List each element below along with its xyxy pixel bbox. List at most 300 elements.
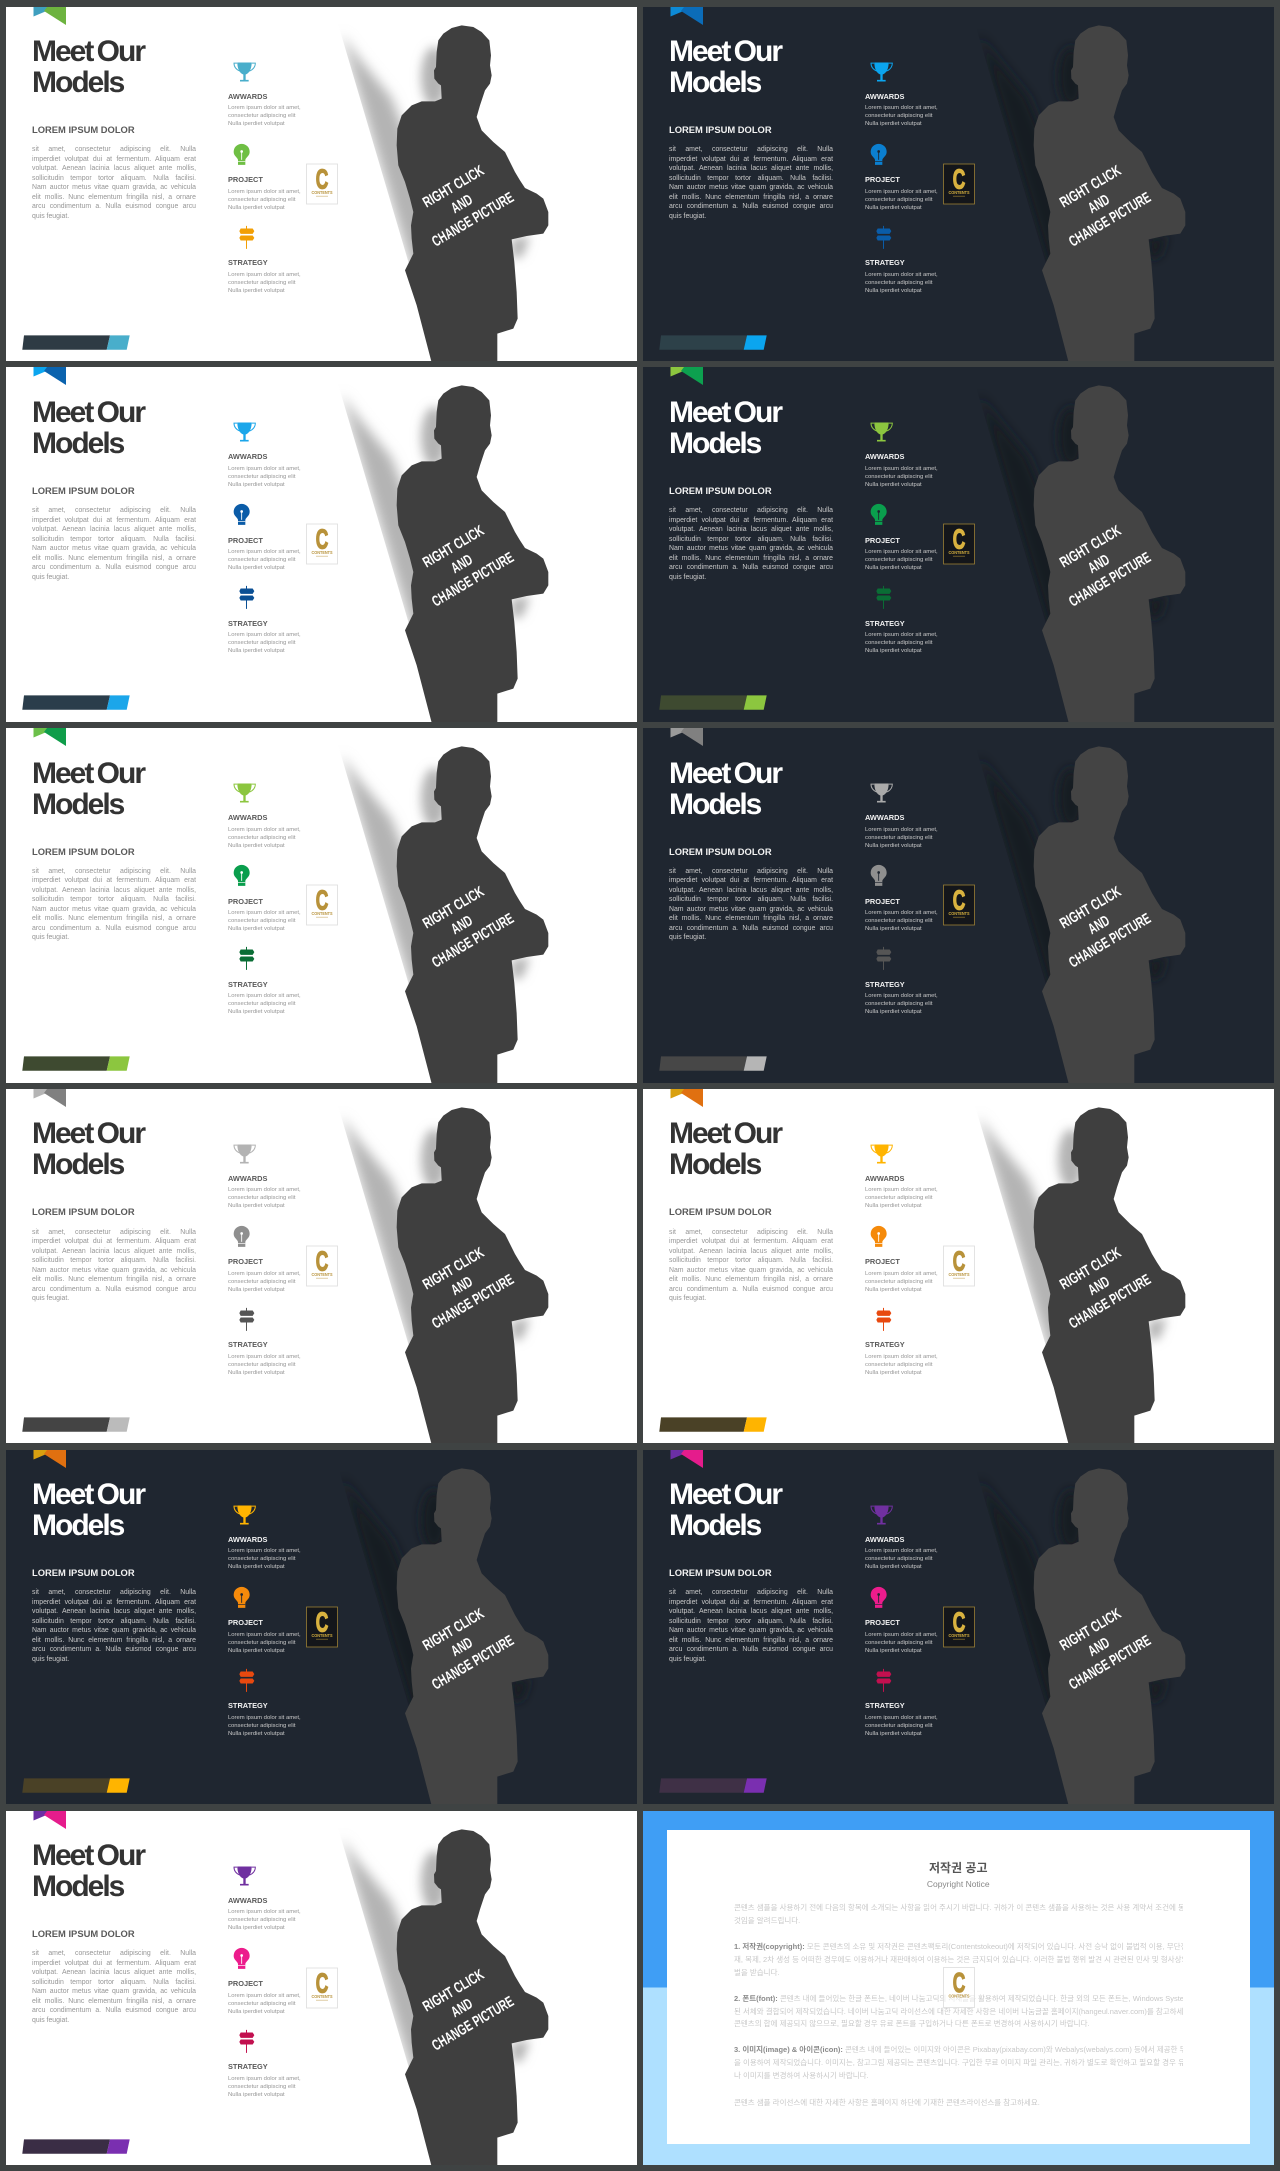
logo badge: C [316,163,328,194]
body text: quis feugiat. [669,213,706,220]
body text: imperdiet volutpat dui at fermentum. Aliquam erat [32,877,196,884]
body text: quis feugiat. [669,934,706,941]
item: strategy: Nulla iperdiet volutpat [228,288,285,294]
picture placeholder label: RIGHT CLICK [1057,883,1124,932]
footer bar [659,696,767,710]
picture placeholder label: CHANGE PICTURE [429,549,517,611]
item: awwards: consectetur adipiscing elit [228,835,295,841]
title: Models [32,1509,123,1542]
logo badge: CONTENTS [948,911,970,916]
diagonal shadow [341,1477,530,1760]
body text: sollicitudin tempor tortor aliquam. Nulla facilisi. [669,1618,833,1625]
item: project: PROJECT [865,897,900,906]
body text: arcu condimentum a. Nulla euismod congue arcu [32,1286,196,1293]
item: awwards [228,1534,310,1571]
item: project: Nulla iperdiet volutpat [865,926,922,932]
item: strategy [228,1700,310,1738]
item: awwards: Nulla iperdiet volutpat [865,843,922,849]
item: awwards: Lorem ipsum dolor sit amet, [865,827,938,833]
item: awwards: Nulla iperdiet volutpat [228,121,285,127]
logo badge: CONTENTS [312,911,333,916]
item: strategy [865,619,938,654]
item: awwards [865,1174,938,1209]
body text [669,506,833,581]
title: Meet Our [32,396,144,429]
picture placeholder label [1057,1605,1154,1693]
subheading: LOREM IPSUM DOLOR [669,1567,772,1578]
item: strategy: Lorem ipsum dolor sit amet, [228,993,301,999]
body text [669,1228,833,1302]
item: awwards: Nulla iperdiet volutpat [228,843,285,849]
item: strategy: Nulla iperdiet volutpat [865,648,922,654]
picture placeholder label: CHANGE PICTURE [429,1632,517,1693]
item: project: Nulla iperdiet volutpat [228,1287,285,1293]
body text: sollicitudin tempor tortor aliquam. Nulla facilisi. [32,175,196,182]
diagonal shadow [341,755,530,1038]
icon: signpost [876,225,891,248]
silhouette [397,386,548,723]
item: project: PROJECT [228,1979,263,1988]
icon: signpost [876,586,891,609]
body text: Nam auctor metus vitae quam gravida, ac vehicula [32,906,196,913]
footer bar [22,1417,130,1432]
picture placeholder label [420,1244,517,1332]
icon: signpost [876,947,891,970]
item: strategy: STRATEGY [228,2062,268,2071]
body text: Nam auctor metus vitae quam gravida, ac vehicula [32,1267,196,1274]
item: awwards [228,452,301,488]
picture placeholder label: RIGHT CLICK [420,522,487,572]
item: awwards: AWWARDS [228,452,267,461]
body text: sollicitudin tempor tortor aliquam. Nulla facilisi. [32,896,196,903]
notice line: 콘텐츠 샘플 라이선스에 대한 자세한 사항은 홈페이지 하단에 기재한 콘텐츠라이선스를 참고하세요. [734,2098,1040,2107]
picture placeholder label [1057,162,1154,250]
title [32,757,146,821]
ribbon [670,728,703,746]
item: awwards: Lorem ipsum dolor sit amet, [865,466,938,472]
item: project [865,536,938,571]
item: strategy: consectetur adipiscing elit [228,280,295,286]
icon: light bulb [234,143,250,164]
body text: Nam auctor metus vitae quam gravida, ac vehicula [669,184,833,191]
body text: volutpat. Aenean lacinia lacus aliquet ante mollis, [669,1248,833,1255]
body text: sollicitudin tempor tortor aliquam. Nulla facilisi. [32,1979,196,1986]
item: strategy [228,980,301,1015]
item: strategy: Lorem ipsum dolor sit amet, [228,272,301,278]
logo badge: CONTENTS [312,1272,333,1277]
icon: trophy [234,1144,255,1163]
item: awwards [865,1534,947,1571]
panel: slide 9, dark, orange [6,1450,636,1804]
item: project: Lorem ipsum dolor sit amet, [865,1632,938,1638]
notice line: 것임을 알려드립니다. [734,1916,800,1925]
picture placeholder label: RIGHT CLICK [1057,1605,1124,1654]
title: Models [32,788,123,821]
picture placeholder label: AND [448,551,476,577]
diagonal shadow [978,755,1167,1038]
subheading: LOREM IPSUM DOLOR [32,846,135,857]
logo badge: C [953,1245,965,1276]
body text: sollicitudin tempor tortor aliquam. Nulla facilisi. [32,1257,196,1264]
icon: light bulb [234,504,250,525]
body text: quis feugiat. [32,2017,69,2024]
item: awwards: Lorem ipsum dolor sit amet, [228,105,301,111]
body text: imperdiet volutpat dui at fermentum. Aliquam erat [669,1599,833,1606]
item: project [865,175,938,210]
body text: imperdiet volutpat dui at fermentum. Aliquam erat [32,1599,196,1606]
notice line: 1. 저작권(copyright): 모든 콘텐츠의 소유 및 저작권은 콘텐츠팩토리(Contentstokeout)에 저작되어 있습니다. 사전 승낙 없이 불법적 이용, 무단전 [734,1942,1183,1951]
silhouette [397,25,548,362]
panel: slide 4, dark, green [643,367,1274,722]
item: project: PROJECT [228,175,263,184]
item: project: Nulla iperdiet volutpat [865,1287,922,1293]
item: awwards: AWWARDS [228,813,267,822]
body text: imperdiet volutpat dui at fermentum. Aliquam erat [32,156,196,163]
footer bar [22,2139,130,2153]
title: Models [32,66,123,99]
logo badge: CONTENTS [312,550,333,555]
subheading: LOREM IPSUM DOLOR [32,1206,135,1217]
item: strategy: Nulla iperdiet volutpat [865,1370,922,1376]
item: awwards: AWWARDS [865,1535,904,1544]
logo badge [306,163,338,204]
item: strategy: Lorem ipsum dolor sit amet, [228,1715,301,1721]
item: project: Lorem ipsum dolor sit amet, [228,188,301,194]
logo badge [306,884,338,925]
silhouette [1034,1107,1185,1445]
item: project: consectetur adipiscing elit [865,918,932,924]
picture placeholder label: RIGHT CLICK [420,162,487,211]
body text: volutpat. Aenean lacinia lacus aliquet ante mollis, [669,1608,833,1615]
logo badge: C [316,524,328,555]
body text: imperdiet volutpat dui at fermentum. Aliquam erat [669,517,833,524]
item: awwards: consectetur adipiscing elit [865,1556,932,1562]
icon: signpost [239,586,254,609]
body text: sit amet, consectetur adipiscing elit. Nulla [669,868,833,875]
picture placeholder label [420,883,517,971]
item: strategy [228,1340,301,1376]
title [669,1479,781,1541]
item: project: consectetur adipiscing elit [228,196,295,202]
item: strategy [865,980,938,1015]
diagonal shadow [341,1116,530,1399]
body text: elit mollis. Nunc elementum fringilla nisl, a ornare [32,1637,196,1644]
title: Meet Our [32,1117,144,1150]
diagonal shadow [978,1116,1167,1399]
ribbon [34,367,66,385]
item: project [228,1978,310,2016]
silhouette [1034,1468,1185,1805]
body text: arcu condimentum a. Nulla euismod congue arcu [669,925,833,932]
item: strategy: Lorem ipsum dolor sit amet, [865,272,938,278]
body text: sollicitudin tempor tortor aliquam. Nulla facilisi. [32,1618,196,1625]
panel: slide 6, dark, gray [643,728,1274,1083]
picture placeholder label: RIGHT CLICK [1057,522,1124,572]
picture placeholder label: CHANGE PICTURE [1066,549,1154,611]
silhouette [397,1829,548,2166]
ribbon [670,1089,703,1107]
title [32,35,146,99]
icon: light bulb [234,865,250,886]
body text: arcu condimentum a. Nulla euismod congue arcu [32,203,196,210]
icon: trophy [234,1505,255,1524]
body text: sollicitudin tempor tortor aliquam. Nulla facilisi. [669,175,833,182]
item: project [228,897,301,932]
body text [32,1228,196,1302]
picture placeholder label: CHANGE PICTURE [429,910,517,971]
title [32,1117,146,1181]
body text: arcu condimentum a. Nulla euismod congue arcu [32,925,196,932]
logo badge: C [953,1606,965,1637]
picture placeholder label: AND [448,191,476,217]
body text: elit mollis. Nunc elementum fringilla nisl, a ornare [32,1276,196,1283]
item: project [228,175,301,210]
body text: Nam auctor metus vitae quam gravida, ac vehicula [32,1627,196,1634]
title [32,1479,144,1541]
item: awwards [228,1174,301,1209]
title [669,1117,783,1181]
body text: volutpat. Aenean lacinia lacus aliquet ante mollis, [32,1608,196,1615]
item: awwards: consectetur adipiscing elit [865,113,932,119]
notice title: 저작권 공고 [929,1860,988,1874]
silhouette [1034,25,1185,362]
item: project [865,1257,938,1293]
body text: quis feugiat. [32,1295,69,1302]
body text: elit mollis. Nunc elementum fringilla nisl, a ornare [669,555,833,562]
body text: arcu condimentum a. Nulla euismod congue arcu [669,564,833,571]
subheading: LOREM IPSUM DOLOR [32,1928,135,1939]
item: project [865,897,938,932]
item: awwards: AWWARDS [228,92,267,100]
icon: signpost [239,947,254,970]
title: Models [669,427,760,460]
item: project: Nulla iperdiet volutpat [865,1648,922,1654]
body text: Nam auctor metus vitae quam gravida, ac vehicula [669,545,833,552]
silhouette [1034,386,1185,723]
body text: Nam auctor metus vitae quam gravida, ac vehicula [32,184,196,191]
diagonal shadow [978,34,1167,316]
icon: light bulb [871,1226,887,1247]
body text: arcu condimentum a. Nulla euismod congue arcu [669,1646,833,1653]
body text: elit mollis. Nunc elementum fringilla nisl, a ornare [32,1998,196,2005]
body text: imperdiet volutpat dui at fermentum. Aliquam erat [32,1238,196,1245]
item: awwards: Lorem ipsum dolor sit amet, [228,1909,301,1915]
item: strategy: Nulla iperdiet volutpat [228,2092,285,2098]
item: strategy: consectetur adipiscing elit [865,1723,932,1729]
logo badge [944,524,974,564]
body text: imperdiet volutpat dui at fermentum. Aliquam erat [669,156,833,163]
item: project: consectetur adipiscing elit [228,1640,295,1646]
item: awwards: AWWARDS [228,1174,267,1183]
body text [32,506,196,581]
ribbon [670,1450,703,1468]
title: Meet Our [32,757,144,790]
diagonal shadow [341,1838,530,2120]
logo badge: CONTENTS [948,1633,970,1638]
icon: signpost [876,1669,891,1692]
body text: arcu condimentum a. Nulla euismod congue arcu [669,1286,833,1293]
logo badge [944,884,974,925]
body text: imperdiet volutpat dui at fermentum. Aliquam erat [32,1960,196,1967]
diagonal shadow [978,1477,1167,1760]
item: awwards: consectetur adipiscing elit [228,1556,295,1562]
icon: signpost [239,1308,254,1331]
notice subtitle: Copyright Notice [927,1878,990,1888]
logo badge: C [953,524,965,555]
body text: sit amet, consectetur adipiscing elit. Nulla [32,1229,196,1236]
body text [669,868,833,941]
ribbon [34,1450,66,1468]
item: project: PROJECT [228,1618,263,1627]
picture placeholder label [420,1605,517,1693]
item: strategy: consectetur adipiscing elit [865,1001,932,1007]
title: Meet Our [32,1478,144,1511]
title [669,757,783,821]
silhouette [397,1107,548,1445]
body text: quis feugiat. [32,574,69,581]
logo badge [944,163,974,204]
item: strategy: STRATEGY [228,1340,268,1349]
body text: elit mollis. Nunc elementum fringilla nisl, a ornare [32,555,196,562]
item: strategy: Nulla iperdiet volutpat [865,1731,922,1737]
body text: sollicitudin tempor tortor aliquam. Nulla facilisi. [669,896,833,903]
footer bar [22,696,130,710]
icon: trophy [234,423,255,442]
logo badge: CONTENTS [312,190,333,194]
logo badge: CONTENTS [312,1633,333,1638]
item: awwards: Lorem ipsum dolor sit amet, [228,1548,301,1554]
item: project: PROJECT [228,536,263,545]
icon: light bulb [871,1587,887,1608]
footer bar [22,1056,130,1071]
picture placeholder label: AND [448,1995,476,2021]
item: awwards [865,92,938,127]
item: strategy: consectetur adipiscing elit [865,640,932,646]
item: awwards: Nulla iperdiet volutpat [228,1203,285,1209]
subheading: LOREM IPSUM DOLOR [32,485,135,496]
footer bar [659,1417,767,1432]
item: awwards: consectetur adipiscing elit [865,835,932,841]
item: project: Nulla iperdiet volutpat [865,565,922,571]
picture placeholder label: AND [1085,551,1113,577]
icon: signpost [239,2029,254,2052]
logo badge: CONTENTS [948,550,970,555]
body text: sit amet, consectetur adipiscing elit. Nulla [32,868,196,875]
item: project: PROJECT [865,175,900,184]
item: awwards: consectetur adipiscing elit [228,1917,295,1923]
picture placeholder label: RIGHT CLICK [420,1605,487,1654]
item: awwards: consectetur adipiscing elit [228,1195,295,1201]
body text: quis feugiat. [32,934,69,941]
icon: trophy [234,1866,255,1885]
body text: quis feugiat. [32,213,69,220]
item: awwards: Lorem ipsum dolor sit amet, [228,827,301,833]
panel: slide 11, white, purple [6,1810,636,2165]
item: strategy: Nulla iperdiet volutpat [865,288,922,294]
body text: quis feugiat. [669,1295,706,1302]
footer bar [22,1778,130,1792]
item: project: consectetur adipiscing elit [865,196,932,202]
picture placeholder label [420,522,517,611]
item: strategy: Lorem ipsum dolor sit amet, [228,1354,301,1360]
icon: light bulb [234,1587,250,1608]
title: Models [32,1870,123,1903]
picture placeholder label: CHANGE PICTURE [1066,189,1154,250]
item: strategy: Nulla iperdiet volutpat [228,1731,285,1737]
body text: imperdiet volutpat dui at fermentum. Aliquam erat [669,877,833,884]
item: awwards: AWWARDS [865,452,904,461]
logo badge [306,1606,338,1647]
body text: arcu condimentum a. Nulla euismod congue arcu [32,2007,196,2014]
logo badge [944,1245,974,1286]
icon: trophy [871,1505,892,1524]
body text: volutpat. Aenean lacinia lacus aliquet ante mollis, [32,887,196,894]
logo badge [944,1606,974,1647]
item: strategy: STRATEGY [228,980,268,989]
body text: Nam auctor metus vitae quam gravida, ac vehicula [669,906,833,913]
panel: slide 10, dark, purple [643,1450,1274,1804]
logo badge: CONTENTS [948,1272,970,1277]
item: strategy [865,258,938,294]
picture placeholder label: RIGHT CLICK [420,1244,487,1293]
body text: quis feugiat. [669,1656,706,1663]
item: strategy: STRATEGY [865,1701,905,1710]
logo badge: C [316,1606,328,1637]
item: strategy: Nulla iperdiet volutpat [865,1009,922,1015]
item: project: Lorem ipsum dolor sit amet, [228,1271,301,1277]
item: strategy: STRATEGY [228,619,268,628]
body text: sit amet, consectetur adipiscing elit. Nulla [32,1589,196,1596]
panel: slide 8, white, orange [643,1089,1274,1443]
silhouette [397,1468,548,1805]
title: Models [32,1148,123,1181]
logo badge [943,1967,975,2008]
icon: trophy [871,784,892,803]
item: strategy: Lorem ipsum dolor sit amet, [865,993,938,999]
body text: Nam auctor metus vitae quam gravida, ac vehicula [669,1627,833,1634]
picture placeholder label: AND [448,912,476,938]
item: strategy: consectetur adipiscing elit [228,640,295,646]
item: project: Lorem ipsum dolor sit amet, [228,910,301,916]
body text: volutpat. Aenean lacinia lacus aliquet ante mollis, [669,887,833,894]
logo badge: C [953,884,965,916]
item: project: Lorem ipsum dolor sit amet, [228,549,301,555]
body text: volutpat. Aenean lacinia lacus aliquet ante mollis, [669,526,833,533]
title: Meet Our [32,35,144,68]
body text: sit amet, consectetur adipiscing elit. Nulla [669,146,833,153]
item: awwards: Nulla iperdiet volutpat [865,121,922,127]
item: project: consectetur adipiscing elit [865,1279,932,1285]
item: strategy: Nulla iperdiet volutpat [228,1009,285,1015]
body text: volutpat. Aenean lacinia lacus aliquet ante mollis, [32,165,196,172]
item: strategy: STRATEGY [865,258,905,267]
footer bar [659,1778,767,1792]
item: strategy: STRATEGY [228,258,268,267]
body text: Nam auctor metus vitae quam gravida, ac vehicula [32,1988,196,1995]
body text [32,868,196,941]
panel: copyright notice [643,1810,1274,2165]
body text: elit mollis. Nunc elementum fringilla nisl, a ornare [669,194,833,201]
item: project: consectetur adipiscing elit [228,1279,295,1285]
silhouette [397,746,548,1084]
item: awwards: consectetur adipiscing elit [228,113,295,119]
logo badge [306,1245,338,1286]
item: strategy: Lorem ipsum dolor sit amet, [228,2076,301,2082]
picture placeholder label [420,162,517,250]
item: awwards: Nulla iperdiet volutpat [228,1564,285,1570]
picture placeholder label [420,1966,517,2054]
body text [32,146,196,220]
